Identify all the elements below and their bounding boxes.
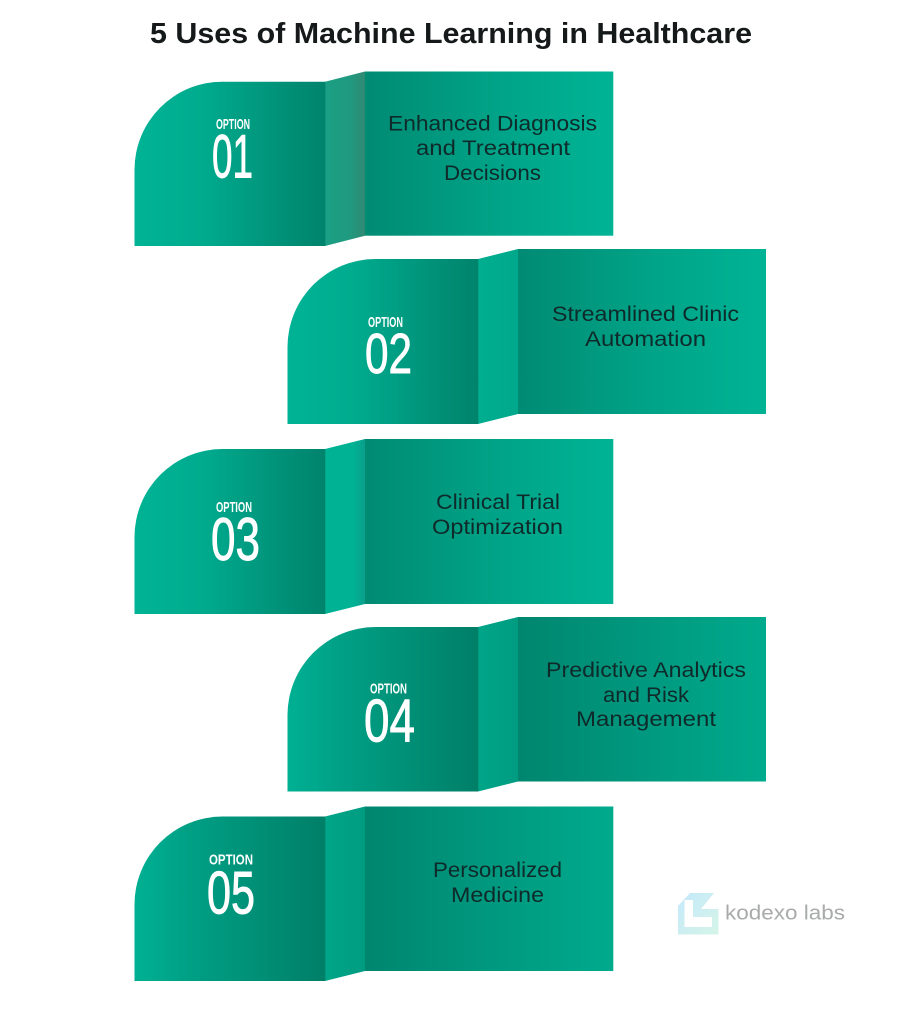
panel: option 01 (134, 72, 613, 246)
description 01 (388, 112, 597, 185)
icon: logo mark (678, 893, 718, 934)
left tab 02 (288, 259, 478, 424)
fold 03 (325, 439, 365, 614)
fold 02 (478, 249, 518, 424)
number 02: 02 (365, 322, 412, 386)
description 03: Clinical Trial (436, 490, 560, 514)
description 01: and Treatment (416, 136, 570, 160)
right body 03 (365, 439, 613, 604)
left tab 03 (134, 449, 325, 614)
panel: option 02 (288, 249, 766, 424)
panel: option 04 (288, 617, 766, 792)
fold 01 (325, 72, 365, 246)
description 05 (433, 858, 562, 907)
number 04: 04 (364, 688, 415, 754)
option label 02: OPTION (368, 314, 403, 331)
fold 04 (478, 617, 518, 792)
description 04: and Risk (603, 683, 689, 707)
number 03: 03 (211, 506, 260, 573)
description 02: Streamlined Clinic (552, 302, 739, 326)
description 05: Personalized (433, 858, 562, 882)
title: 5 Uses of Machine Learning in Healthcare (150, 18, 752, 50)
number 05: 05 (207, 860, 255, 926)
right body 01 (365, 72, 613, 236)
logo wordmark: kodexo labs (725, 902, 845, 924)
logo: kodexo labs (678, 893, 845, 934)
right body 04 (518, 617, 766, 782)
option label 04: OPTION (370, 680, 407, 698)
description 02: Automation (585, 327, 706, 351)
description 04: Predictive Analytics (546, 658, 746, 682)
left tab 01 (134, 82, 325, 246)
option label 03: OPTION (216, 499, 252, 516)
option label 05: OPTION (209, 852, 253, 868)
description 03: Optimization (432, 515, 563, 539)
left tab 05 (134, 816, 325, 981)
option label 01: OPTION (216, 116, 250, 133)
fold 05 (325, 806, 365, 981)
description 03 (432, 490, 563, 539)
description 02 (552, 302, 739, 351)
description 04: Management (576, 707, 716, 731)
description 04 (546, 658, 746, 731)
description 05: Medicine (451, 883, 544, 907)
number 01: 01 (212, 122, 253, 190)
description 01: Decisions (444, 161, 541, 185)
panel: option 03 (134, 439, 613, 614)
right body 02 (518, 249, 766, 414)
left tab 04 (288, 627, 478, 792)
panel: option 05 (134, 806, 613, 981)
right body 05 (365, 806, 613, 971)
description 01: Enhanced Diagnosis (388, 112, 597, 136)
